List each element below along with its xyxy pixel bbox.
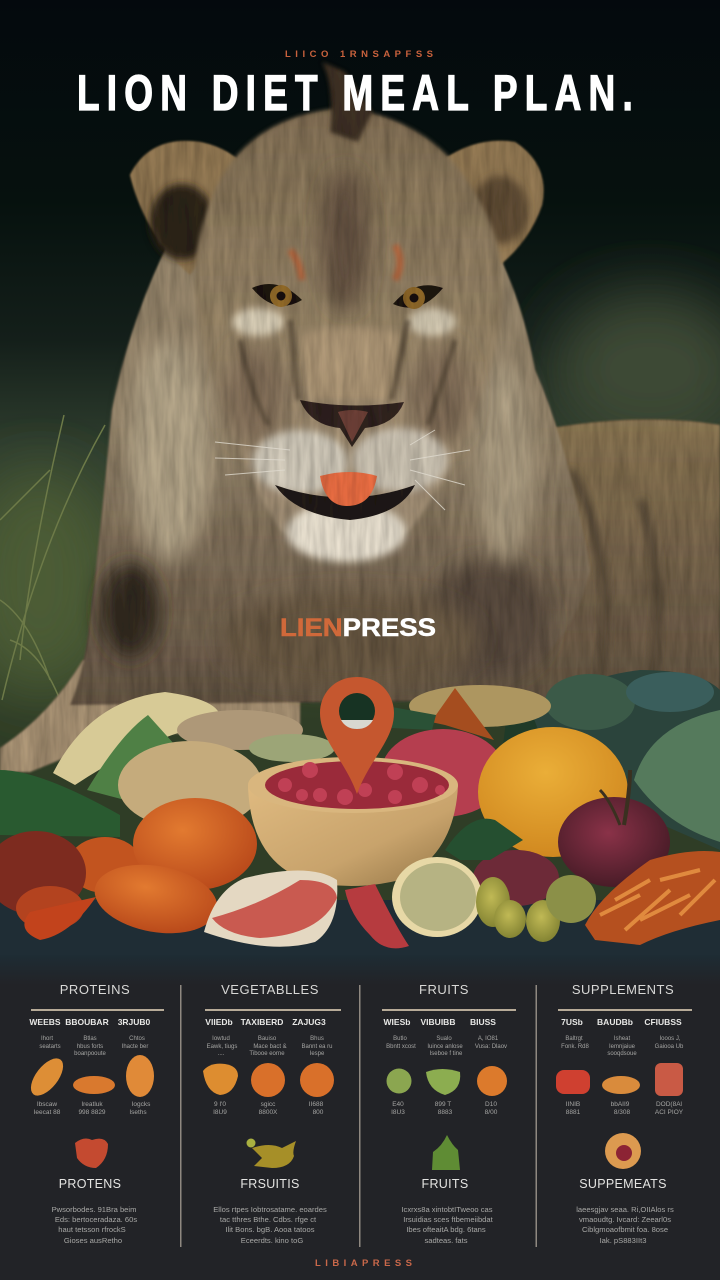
- red florets: [0, 831, 86, 915]
- icon: squash bowl: [203, 1064, 238, 1095]
- icon: green guava: [386, 1068, 412, 1094]
- sub-columns: vegetables: ....: [218, 1051, 225, 1057]
- sub-columns: fruits: Butlo: [393, 1036, 407, 1042]
- lion whiskers: [215, 430, 470, 510]
- labels: I8U3: [391, 1109, 405, 1116]
- sub-columns: fruits: BIUSS: [470, 1017, 496, 1027]
- description: Iak. pS883IIt3: [600, 1236, 646, 1245]
- sub-columns: proteins: boanpooute: [74, 1051, 107, 1057]
- labels: E40: [392, 1101, 404, 1108]
- sub-columns: proteins: hbus forts: [77, 1044, 103, 1050]
- apple: [558, 770, 670, 887]
- icon: red jar: [655, 1063, 683, 1096]
- background: blurred savanna: [0, 0, 720, 1000]
- description: Pwsorbodes. 91Bra beim: [52, 1205, 136, 1214]
- bowl: [248, 757, 458, 886]
- description: Eceerdts. kino toG: [241, 1236, 303, 1245]
- icon: round supplement: [605, 1133, 641, 1169]
- subheading: supplements: SUPPEMEATS: [579, 1177, 667, 1191]
- panel: proteins: [25, 982, 164, 1245]
- sub-columns: vegetables: [205, 1017, 333, 1057]
- description: [401, 1205, 494, 1245]
- sub-columns: vegetables: VIIEDb: [205, 1017, 233, 1027]
- sub-columns: proteins: 3RJUB0: [118, 1017, 151, 1027]
- sub-columns: fruits: [384, 1017, 507, 1057]
- labels: 8881: [566, 1109, 581, 1116]
- sub-columns: proteins: Ihacte ber: [122, 1044, 148, 1050]
- lion tongue: [320, 472, 377, 506]
- labels: [213, 1101, 324, 1116]
- icon: orange vegetable two: [300, 1063, 334, 1097]
- labels: Iseths: [129, 1109, 147, 1116]
- sub-columns: proteins: seatarts: [39, 1044, 61, 1050]
- back green dish: [249, 734, 335, 762]
- sub-columns: proteins: BBOUBAR: [65, 1017, 109, 1027]
- panel: fruits: [382, 982, 516, 1245]
- large orange: [133, 798, 257, 890]
- sub-columns: vegetables: ZAJUG3: [292, 1017, 326, 1027]
- description: Eds: bertoceradaza. 60s: [55, 1215, 137, 1224]
- sub-columns: supplements: Iemnjaiue: [609, 1044, 636, 1050]
- sub-columns: vegetables: Eawk, tiugs: [207, 1044, 237, 1050]
- sub-columns: vegetables: Iowtud: [212, 1036, 230, 1042]
- sub-columns: supplements: [561, 1017, 684, 1057]
- labels: IINIB: [566, 1101, 580, 1108]
- labels: D10: [485, 1101, 497, 1108]
- description: tac tthres Bthe. Cdbs. rfge ct: [220, 1215, 317, 1224]
- sub-columns: fruits: Bbntt xcost: [386, 1044, 416, 1050]
- description: [576, 1205, 674, 1245]
- sub-columns: vegetables: Bannt ea ru: [301, 1044, 333, 1050]
- icon: seeded almond: [25, 1053, 69, 1101]
- description: Ellos rtpes Iobtrosatame. eoardes: [213, 1205, 327, 1214]
- big yellow orange: [478, 727, 628, 857]
- icon: amber dish: [602, 1076, 640, 1094]
- icon: orange: [477, 1066, 507, 1096]
- sub-columns: proteins: Ihort: [41, 1036, 53, 1042]
- panel: supplements: [556, 982, 692, 1245]
- left leaf: [87, 715, 184, 800]
- sub-columns: supplements: Isheat: [614, 1036, 630, 1042]
- description: sadteas. fats: [424, 1236, 468, 1245]
- labels: 8/00: [485, 1109, 498, 1116]
- small green fruits: [476, 875, 596, 942]
- bottom panel: [0, 955, 720, 1280]
- shredded carrots: [585, 851, 720, 945]
- back squash: [431, 688, 494, 740]
- sub-columns: vegetables: TAXIBERD: [241, 1017, 283, 1027]
- sub-columns: fruits: Iseboe f tine: [430, 1051, 463, 1057]
- labels: [391, 1101, 498, 1116]
- lion right ear: [430, 141, 543, 265]
- footer brand: LIBIAPRESS: [315, 1258, 412, 1269]
- labels: 899 T: [435, 1101, 451, 1108]
- labels: DOD(8Al: [656, 1101, 683, 1108]
- icon: red meat: [75, 1139, 108, 1168]
- lion body: [480, 420, 720, 700]
- subheading: fruitis: FRSUITIS: [240, 1177, 300, 1191]
- heading: vegetables: VEGETABLLES: [221, 982, 319, 997]
- sub-columns: fruits: Iuince anlose: [427, 1044, 463, 1050]
- food arrangement: [0, 670, 720, 990]
- icon: mango: [126, 1055, 154, 1097]
- labels: sgicc: [261, 1101, 276, 1108]
- onion: [118, 741, 262, 829]
- left lettuce: [0, 770, 120, 837]
- sub-columns: supplements: Gaiooa Ub: [655, 1044, 684, 1050]
- labels: [566, 1101, 684, 1116]
- sub-columns: fruits: WIESb: [384, 1017, 410, 1027]
- sub-columns: supplements: Iooos J,: [659, 1036, 681, 1042]
- sub-columns: vegetables: Mace bact &: [253, 1044, 287, 1050]
- sub-columns: proteins: WEEBS: [29, 1017, 61, 1027]
- heading: proteins: PROTEINS: [60, 982, 130, 997]
- labels: Ibscaw: [37, 1101, 57, 1108]
- sub-columns: proteins: Chtos: [129, 1036, 145, 1042]
- sub-columns: supplements: Baltrgt: [565, 1036, 583, 1042]
- top kicker: LIICO 1RNSAPFSS: [285, 49, 433, 60]
- icon: green vegetable: [432, 1135, 460, 1170]
- description: [52, 1205, 137, 1245]
- sub-columns: vegetables: Iespe: [310, 1051, 325, 1057]
- description: haut tetsson rfrockS: [58, 1225, 126, 1234]
- sub-columns: vegetables: Tibooe eorne: [249, 1051, 285, 1057]
- description: [213, 1205, 327, 1245]
- sub-columns: fruits: VIBUIBB: [421, 1017, 455, 1027]
- sub-columns: supplements: BAUDBb: [597, 1017, 633, 1027]
- yellow squash: [53, 692, 220, 785]
- lion left eye: [252, 284, 302, 307]
- description: Irsuidias sces ftbemeiibdat: [403, 1215, 494, 1224]
- lion: [0, 62, 720, 772]
- lion muzzle: [252, 428, 448, 562]
- lion left ear: [130, 141, 258, 275]
- icon: orange vegetable: [251, 1063, 285, 1097]
- icon: red capsule: [556, 1070, 590, 1094]
- potato: [409, 685, 551, 727]
- big cabbage leaf: [634, 710, 720, 842]
- labels: Iogcks: [132, 1101, 151, 1108]
- sub-columns: fruits: Vusa: Dlaov: [475, 1044, 507, 1050]
- title: LION DIET MEAL PLAN.: [77, 66, 633, 121]
- table surface: [0, 900, 720, 990]
- labels: 8/308: [614, 1109, 631, 1116]
- carrot wedge: [24, 897, 96, 940]
- sub-columns: supplements: CFIUBSS: [644, 1017, 682, 1027]
- heading: supplements: SUPPLEMENTS: [572, 982, 674, 997]
- icon: green leaf fruit: [426, 1069, 460, 1095]
- labels: 8800X: [259, 1109, 278, 1116]
- second apple: [473, 850, 559, 906]
- panel: vegetables: [203, 982, 341, 1245]
- sub-columns: vegetables: Bauiso: [258, 1036, 277, 1042]
- labels: Ireatluk: [81, 1101, 103, 1108]
- berries in bowl: [265, 761, 449, 809]
- labels: bbAII9: [611, 1101, 630, 1108]
- sub-columns: supplements: sooqdsoue: [607, 1051, 637, 1057]
- labels: I8U9: [213, 1109, 227, 1116]
- description: Icxrxs8a xintobtITweoo cas: [401, 1205, 493, 1214]
- labels: [34, 1101, 151, 1116]
- map pin: [320, 677, 394, 794]
- subheading: protens: PROTENS: [59, 1177, 121, 1191]
- sub-columns: fruits: A, IO81: [478, 1036, 499, 1042]
- sub-columns: vegetables: Bhus: [310, 1036, 324, 1042]
- labels: ACI PIOY: [655, 1109, 684, 1116]
- sub-columns: supplements: 7USb: [561, 1017, 583, 1027]
- sub-columns: supplements: Fonk. Rd8: [561, 1044, 589, 1050]
- lion mane: [70, 130, 590, 705]
- meat slice: [204, 870, 337, 947]
- back orange: [68, 837, 142, 893]
- labels: 998 8829: [78, 1109, 106, 1116]
- labels: Ieecat 88: [34, 1109, 61, 1116]
- labels: II688: [309, 1101, 324, 1108]
- lemon half: [392, 857, 482, 937]
- lion head: [195, 108, 503, 550]
- sub-columns: proteins: Btlas: [83, 1036, 97, 1042]
- brand logo: LIENPRESS: [280, 614, 436, 642]
- description: Ciblgmoaofbmit foa. 8ose: [582, 1225, 668, 1234]
- elongated orange: [89, 856, 223, 942]
- description: Ilit Bons. bgB. Aooa tatoos: [225, 1225, 315, 1234]
- labels: 9 I'0: [214, 1101, 226, 1108]
- sub-columns: fruits: Sualo: [436, 1036, 452, 1042]
- description: Gioses ausRetho: [64, 1236, 122, 1245]
- sub-columns: proteins: [29, 1017, 151, 1057]
- heading: fruits: FRUITS: [419, 982, 469, 997]
- labels: 800: [313, 1109, 324, 1116]
- leaf behind pin: [392, 707, 436, 730]
- lion foreleg: [0, 660, 300, 772]
- icon: nut pile: [73, 1076, 115, 1094]
- description: laeesgjav seaa. Ri,OIIAlos rs: [576, 1205, 674, 1214]
- back greens right: [503, 670, 720, 850]
- description: vmaoudtg. Ivcard: Zeearl0s: [579, 1215, 671, 1224]
- icon: yellow gourd: [246, 1138, 296, 1168]
- subheading: fruits: FRUITS: [422, 1177, 468, 1191]
- red meat: [381, 729, 505, 817]
- red fish piece: [345, 884, 409, 948]
- lion right eye: [393, 285, 443, 309]
- description: Ibes ofteaitA bdg. 6tans: [406, 1225, 486, 1234]
- lion nose: [300, 400, 404, 447]
- labels: 8883: [438, 1109, 453, 1116]
- herb sprig: [445, 819, 523, 860]
- lion paw: [177, 710, 303, 750]
